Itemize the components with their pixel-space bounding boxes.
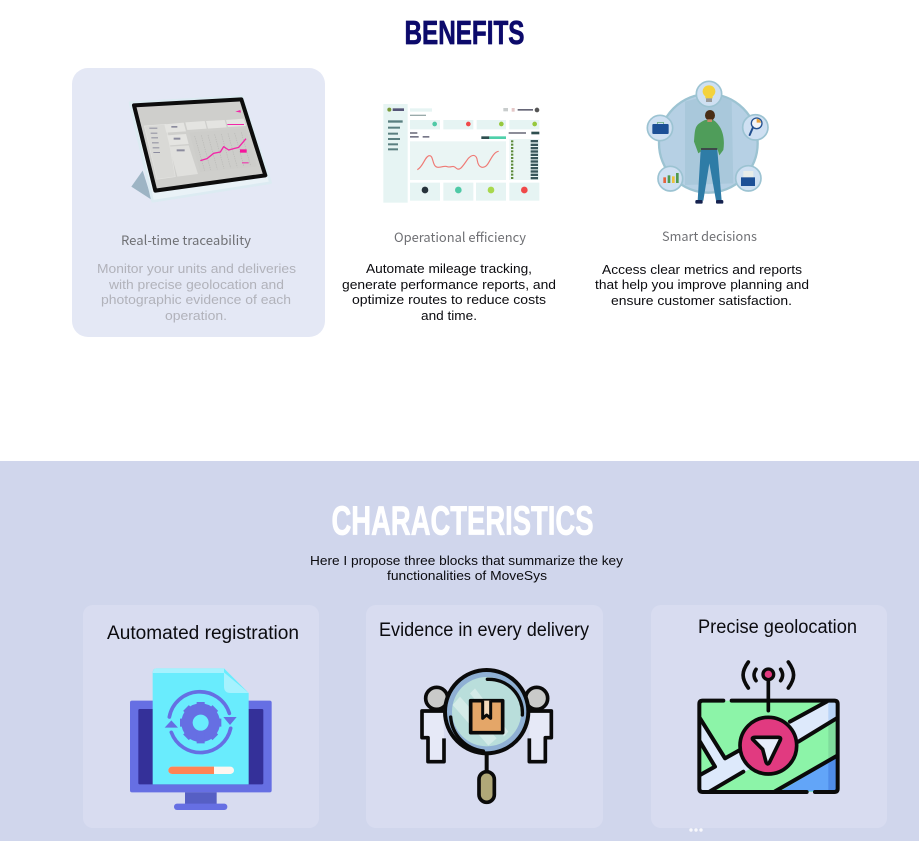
text: real-time traceability description [97, 261, 297, 323]
text: operational efficiency description: generate performance reports, and [342, 277, 556, 292]
title: Benefits: BENEFITS [404, 15, 524, 52]
text: real-time traceability description: operation. [165, 308, 227, 323]
text: characteristics subtitle: Here I propose three blocks that summarize the key [310, 553, 624, 568]
text: operational efficiency description [342, 261, 556, 323]
heading: real-time traceability: Real-time traceability [121, 230, 251, 249]
heading: operational efficiency: Operational efficiency [394, 227, 526, 246]
icon: magnifier over delivery box with people [422, 670, 551, 802]
text: smart decisions description: ensure customer satisfaction. [611, 293, 792, 308]
icon: tablet dashboard [130, 97, 271, 201]
text: smart decisions description: that help you improve planning and [595, 277, 809, 292]
heading: automated registration: Automated registration [107, 623, 299, 644]
text: characteristics subtitle: functionalities of MoveSys [387, 568, 548, 583]
text: operational efficiency description: optimize routes to reduce costs [352, 292, 547, 307]
text: real-time traceability description: photographic evidence of each [101, 292, 291, 307]
text: operational efficiency description: Automate mileage tracking, [366, 261, 532, 276]
card: evidence in every delivery [366, 605, 603, 828]
icon: person surrounded by business symbols [647, 81, 768, 204]
heading: smart decisions: Smart decisions [662, 226, 757, 245]
decorative pagination dots [689, 828, 703, 832]
panel: operational efficiency [342, 104, 556, 323]
panel: smart decisions [595, 81, 809, 308]
icon: analytics dashboard [383, 104, 539, 203]
heading: precise geolocation: Precise geolocation [698, 617, 857, 638]
section: characteristics background [0, 461, 919, 841]
text: operational efficiency description: and time. [421, 308, 477, 323]
card: precise geolocation [651, 605, 887, 828]
card: automated registration [83, 605, 319, 828]
icon: map with location pointer and antenna [699, 662, 838, 792]
text: smart decisions description [595, 262, 809, 308]
text: real-time traceability description: Monitor your units and deliveries [97, 261, 297, 276]
text: real-time traceability description: with precise geolocation and [108, 277, 284, 292]
title: Characteristics: CHARACTERISTICS [332, 498, 594, 544]
panel: real-time traceability [72, 68, 325, 337]
text: smart decisions description: Access clear metrics and reports [602, 262, 803, 277]
icon: monitor with gear document [130, 668, 272, 810]
heading: evidence in every delivery: Evidence in every delivery [379, 620, 589, 641]
text: characteristics subtitle [310, 553, 624, 583]
